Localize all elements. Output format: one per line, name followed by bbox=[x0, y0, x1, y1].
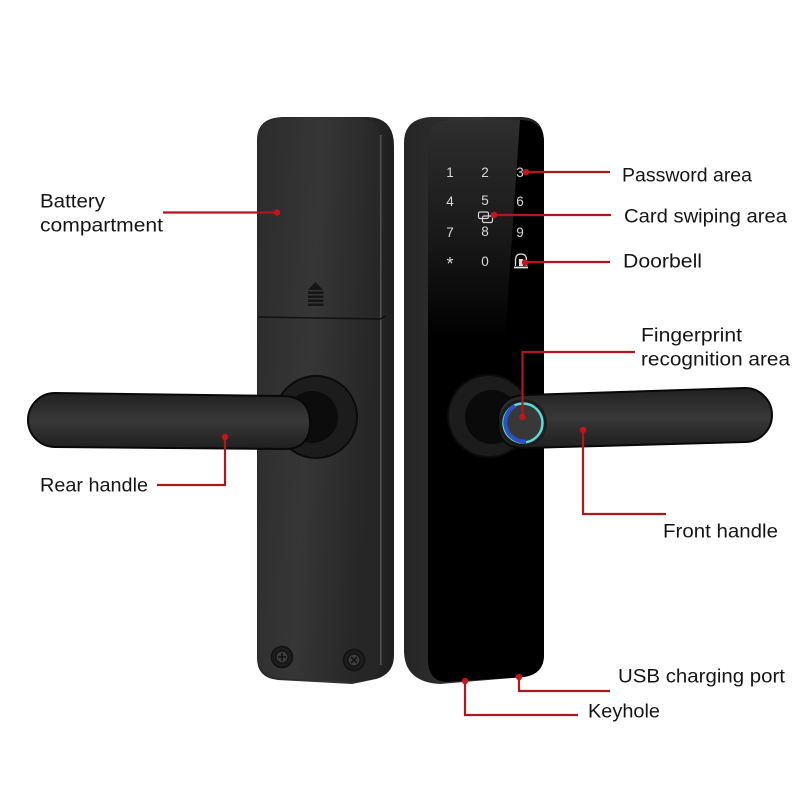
callout: doorbell bbox=[522, 250, 702, 272]
keypad: 6 bbox=[516, 194, 524, 209]
callout: battery compartment: compartment bbox=[40, 214, 164, 236]
callout: password area: Password area bbox=[622, 164, 752, 186]
callout: fingerprint recognition area: Fingerprint bbox=[641, 324, 743, 346]
icon: left screw bbox=[272, 646, 292, 668]
rear lock panel bbox=[257, 117, 394, 684]
icon: right screw bbox=[344, 650, 364, 670]
keypad: 7 bbox=[446, 225, 454, 240]
keypad: 5 bbox=[481, 193, 489, 208]
callout: doorbell: Doorbell bbox=[623, 250, 702, 272]
callout: battery compartment bbox=[40, 190, 280, 236]
keypad: 8 bbox=[481, 224, 489, 239]
rear rosette bbox=[275, 376, 357, 458]
callout: card swiping area: Card swiping area bbox=[624, 206, 787, 228]
icon: doorbell bbox=[514, 254, 528, 268]
icon: card swipe bbox=[478, 212, 492, 222]
keypad bbox=[446, 165, 524, 274]
callout: front handle bbox=[580, 427, 778, 542]
callout: keyhole bbox=[462, 678, 660, 722]
keypad: 2 bbox=[481, 165, 489, 180]
callout: fingerprint recognition area bbox=[519, 324, 790, 420]
callout: USB charging port: USB charging port bbox=[618, 666, 786, 688]
callout: battery compartment: Battery bbox=[40, 190, 105, 212]
callout: fingerprint recognition area: recognition area bbox=[641, 348, 790, 370]
front rosette bbox=[448, 375, 530, 457]
icon: battery cover arrow bbox=[308, 282, 324, 306]
callout: USB charging port bbox=[516, 666, 786, 691]
callout: rear handle: Rear handle bbox=[40, 474, 148, 496]
rear handle bbox=[28, 393, 310, 449]
keypad: 4 bbox=[446, 194, 454, 209]
keypad: 0 bbox=[481, 254, 489, 269]
keypad: 9 bbox=[516, 225, 524, 240]
keypad: * bbox=[446, 254, 454, 274]
callout: front handle: Front handle bbox=[663, 520, 778, 542]
callout: card swiping area bbox=[491, 206, 787, 228]
front handle bbox=[498, 388, 772, 448]
keypad: 1 bbox=[446, 165, 454, 180]
icon: fingerprint ring bbox=[499, 399, 547, 447]
callout: rear handle bbox=[40, 434, 228, 496]
callout: password area bbox=[523, 164, 752, 186]
callout: keyhole: Keyhole bbox=[588, 700, 660, 722]
keypad: 3 bbox=[516, 165, 524, 180]
front lock panel bbox=[404, 117, 544, 684]
